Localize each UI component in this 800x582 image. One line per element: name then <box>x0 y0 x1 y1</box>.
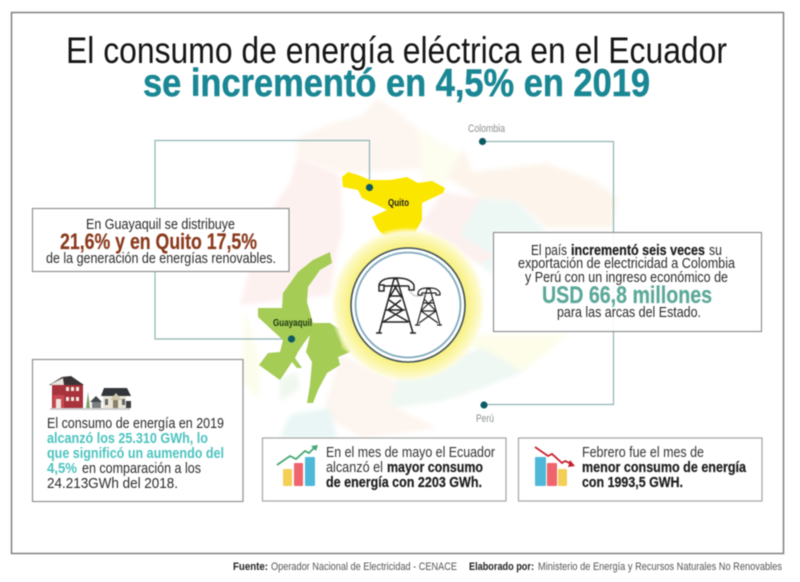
icon: rising bar chart <box>277 445 318 486</box>
title <box>66 30 727 105</box>
panel: 2019 total consumption: 4,5% <box>47 460 77 477</box>
panel: exports to Colombia and Perú: exportación de electricidad a Colombia <box>518 256 736 272</box>
Guayaquil province <box>258 252 358 403</box>
panel: 2019 total consumption: 24.213GWh del 2018. <box>47 475 178 492</box>
marker: Perú <box>480 401 488 409</box>
icon: houses <box>49 376 131 410</box>
panel: 2019 total consumption: El consumo de energía en 2019 <box>47 415 224 432</box>
footer: sources: Operador Nacional de Electricidad - CENACE <box>271 561 457 573</box>
title: se incrementó en 4,5% en 2019 <box>143 62 650 105</box>
panel: 2019 total consumption: alcanzó los 25.310 GWh, lo <box>47 430 208 447</box>
panel: highest consumption in May <box>262 438 506 501</box>
panel: exports to Colombia and Perú: para las arcas del Estado. <box>557 305 701 321</box>
panel: 2019 total consumption: en comparación a los <box>82 460 201 477</box>
label: Colombia: Colombia <box>468 123 506 135</box>
connector: Colombia and Perú callout <box>482 142 614 404</box>
connector: Quito and Guayaquil callout <box>155 140 370 339</box>
footer: sources: Elaborado por: <box>469 561 534 573</box>
panel: exports to Colombia and Perú: su <box>709 243 722 259</box>
panel: exports to Colombia and Perú: incrementó seis veces <box>571 243 705 259</box>
panel: highest consumption in May: mayor consumo <box>387 460 483 476</box>
icon: falling bar chart <box>535 447 575 486</box>
marker: Colombia <box>479 138 486 145</box>
yellow glow behind the circle <box>330 227 486 383</box>
label: Guayaquil: Guayaquil <box>273 317 312 329</box>
panel: 2019 total consumption: que significó un aumendo del <box>47 445 224 462</box>
footer: sources: Fuente: <box>233 561 268 573</box>
panel: exports to Colombia and Perú: El país <box>531 243 567 259</box>
panel: lowest consumption in February: con 1993,5 GWH. <box>582 475 683 491</box>
marker: Guayaquil <box>288 335 295 343</box>
footer: sources <box>233 561 782 573</box>
panel: lowest consumption in February: menor consumo de energía <box>582 460 747 476</box>
pale background map of Ecuador <box>240 98 617 438</box>
Quito province <box>342 172 445 240</box>
panel: highest consumption in May: de energía con 2203 GWh. <box>326 475 482 491</box>
label: Quito: Quito <box>388 197 409 209</box>
panel: Guayaquil and Quito renewables: 21,6% y en Quito 17,5% <box>60 229 257 254</box>
panel: highest consumption in May: alcanzó el <box>326 460 383 476</box>
panel: exports to Colombia and Perú: y Perú con un ingreso económico de <box>525 270 728 286</box>
panel: lowest consumption in February: Febrero fue el mes de <box>582 445 704 461</box>
panel: highest consumption in May: En el mes de mayo el Ecuador <box>326 445 495 461</box>
marker: Quito <box>366 184 373 191</box>
icon: transmission towers in a circle <box>351 248 465 362</box>
Guayaquil province eastern edge <box>338 327 358 352</box>
panel: lowest consumption in February <box>518 438 762 501</box>
panel: exports to Colombia and Perú <box>494 232 762 332</box>
label: Perú: Perú <box>476 413 494 425</box>
panel: Guayaquil and Quito renewables: de la generación de energías renovables. <box>46 251 276 267</box>
panel: exports to Colombia and Perú: USD 66,8 millones <box>542 282 712 309</box>
panel: 2019 total consumption <box>32 360 243 502</box>
panel: Guayaquil and Quito renewables: En Guayaquil se distribuye <box>86 217 235 233</box>
panel: Guayaquil and Quito renewables <box>32 208 289 272</box>
